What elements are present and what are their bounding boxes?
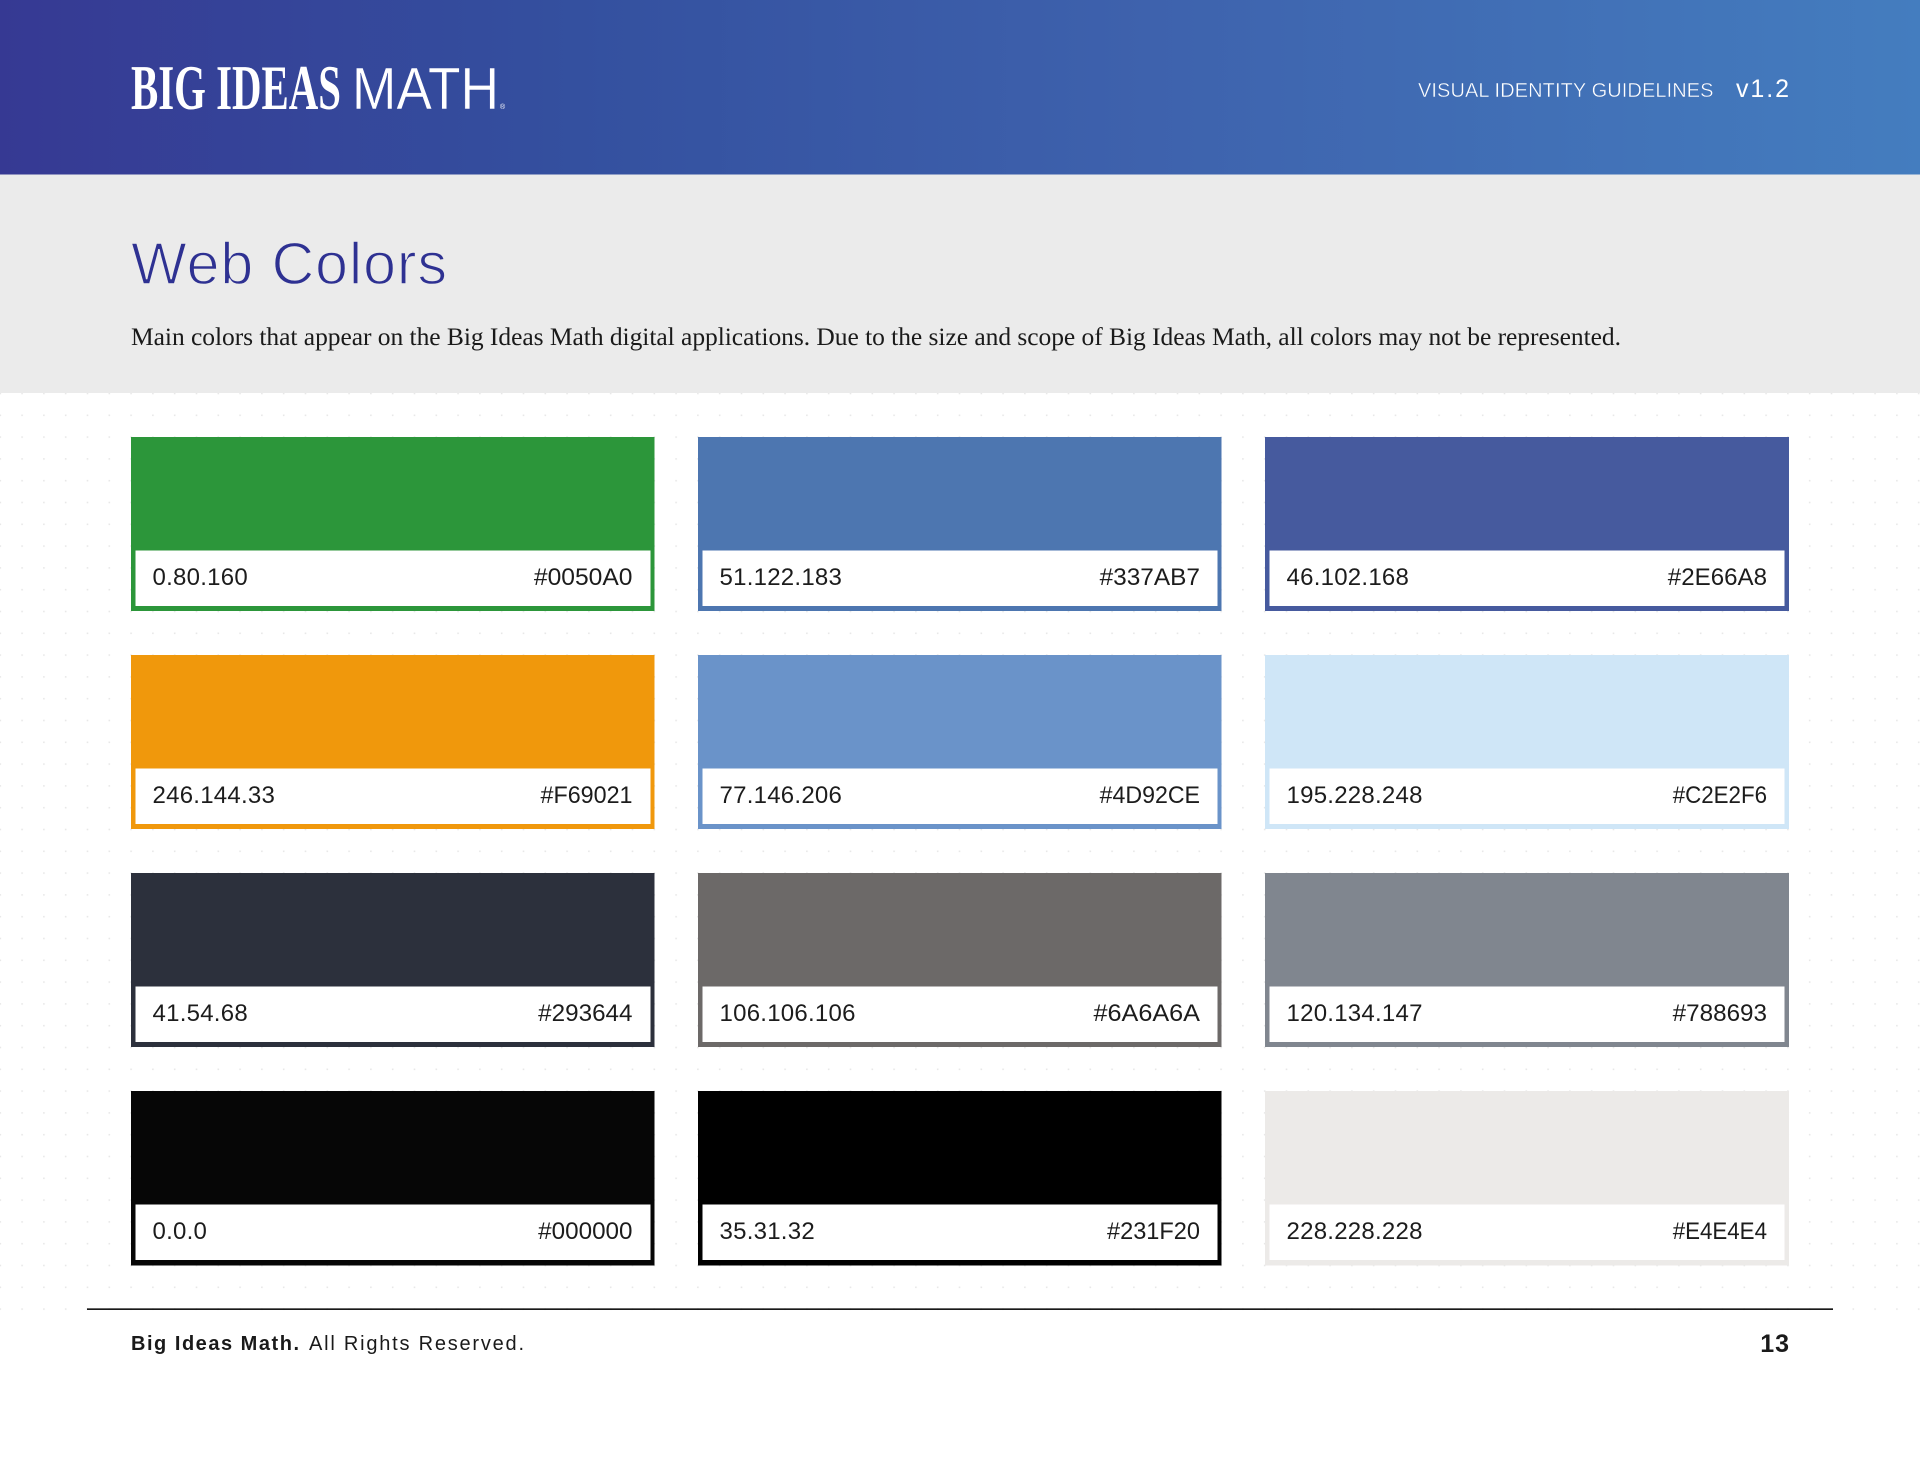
swatch: 77.146.206 mid blue: #4D92CE bbox=[1100, 782, 1200, 809]
swatch: 77.146.206 mid blue bbox=[698, 655, 1222, 829]
document label: VISUAL IDENTITY GUIDELINES bbox=[1418, 80, 1714, 102]
footer copyright: All Rights Reserved. bbox=[309, 1333, 524, 1355]
title panel bbox=[0, 174, 1920, 393]
swatch: 46.102.168 navy: 46.102.168 bbox=[1286, 564, 1409, 591]
swatch: 195.228.248 light blue: 195.228.248 bbox=[1286, 782, 1423, 809]
swatch: 41.54.68 charcoal bbox=[131, 873, 654, 1047]
swatch: 41.54.68 charcoal: #293644 bbox=[538, 1000, 632, 1027]
description: Main colors that appear on the Big Ideas Math digital applications. Due to the size and scope of Big Ideas Math, all colors may not be represented. bbox=[131, 322, 1621, 351]
swatch: 46.102.168 navy bbox=[1265, 437, 1789, 611]
swatch: 228.228.228 light gray: 228.228.228 bbox=[1286, 1218, 1423, 1245]
logo: ® bbox=[500, 103, 506, 111]
swatch: 0.80.160 green: 0.80.160 bbox=[152, 564, 248, 591]
swatch: 51.122.183 blue bbox=[698, 437, 1222, 611]
swatch: 77.146.206 mid blue: 77.146.206 bbox=[720, 782, 842, 809]
logo: MATH bbox=[352, 56, 499, 122]
version: v1.2 bbox=[1736, 75, 1789, 103]
swatch: 106.106.106 gray: 106.106.106 bbox=[720, 1000, 856, 1027]
swatch: 0.80.160 green bbox=[131, 437, 654, 611]
swatch: 120.134.147 slate bbox=[1265, 873, 1789, 1047]
swatch: 0.0.0 black bbox=[131, 1091, 654, 1266]
swatch: 35.31.32 near black: 35.31.32 bbox=[720, 1218, 815, 1245]
swatch: 0.0.0 black: #000000 bbox=[538, 1218, 632, 1245]
swatch: 246.144.33 orange bbox=[131, 655, 654, 829]
swatch: 228.228.228 light gray: #E4E4E4 bbox=[1673, 1218, 1767, 1245]
logo: BIG IDEAS bbox=[131, 52, 341, 123]
swatch: 195.228.248 light blue: #C2E2F6 bbox=[1673, 782, 1767, 809]
swatch: 246.144.33 orange: #F69021 bbox=[540, 782, 632, 809]
swatch: 106.106.106 gray: #6A6A6A bbox=[1094, 1000, 1200, 1027]
footer copyright: Big Ideas Math. bbox=[131, 1333, 299, 1355]
swatch: 41.54.68 charcoal: 41.54.68 bbox=[152, 1000, 248, 1027]
swatch: 228.228.228 light gray bbox=[1265, 1091, 1789, 1266]
title: Web Colors bbox=[131, 231, 447, 297]
header band bbox=[0, 0, 1920, 174]
swatch: 0.0.0 black: 0.0.0 bbox=[152, 1218, 207, 1245]
swatch: 120.134.147 slate: #788693 bbox=[1673, 1000, 1767, 1027]
swatch: 246.144.33 orange: 246.144.33 bbox=[152, 782, 275, 809]
swatch: 51.122.183 blue: 51.122.183 bbox=[720, 564, 842, 591]
footer copyright bbox=[131, 1333, 524, 1355]
swatch: 106.106.106 gray bbox=[698, 873, 1222, 1047]
swatch: 0.80.160 green: #0050A0 bbox=[534, 564, 632, 591]
swatch: 51.122.183 blue: #337AB7 bbox=[1100, 564, 1200, 591]
page number: 13 bbox=[1760, 1330, 1790, 1358]
swatch: 120.134.147 slate: 120.134.147 bbox=[1286, 1000, 1423, 1027]
swatch: 195.228.248 light blue bbox=[1265, 655, 1789, 829]
swatch: 35.31.32 near black: #231F20 bbox=[1107, 1218, 1200, 1245]
swatch: 46.102.168 navy: #2E66A8 bbox=[1668, 564, 1767, 591]
swatch: 35.31.32 near black bbox=[698, 1091, 1222, 1266]
